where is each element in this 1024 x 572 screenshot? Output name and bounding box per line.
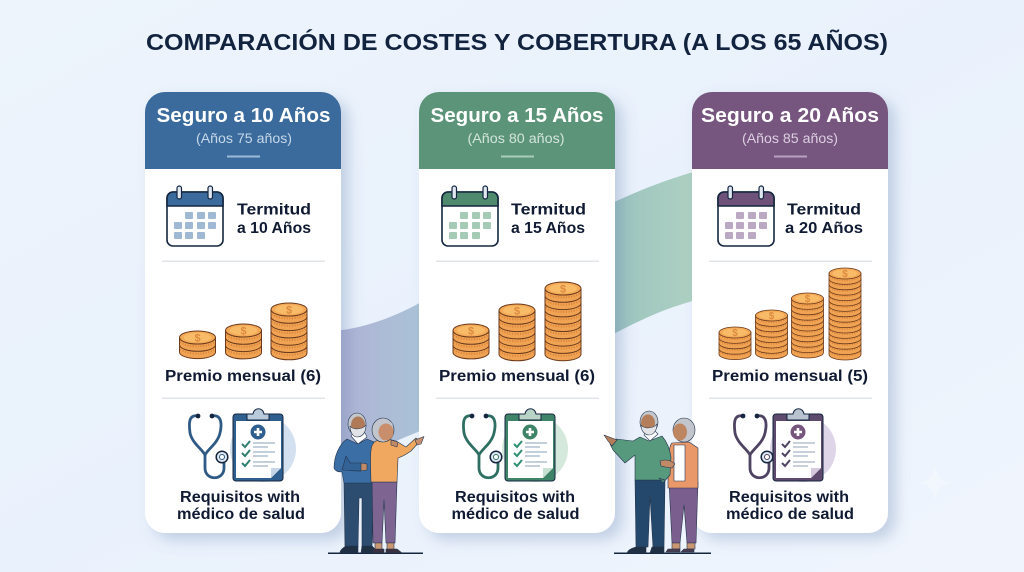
requirements label: médico de salud [726, 506, 854, 523]
card background [692, 92, 888, 533]
term label [237, 202, 311, 237]
hand on arm [660, 460, 675, 468]
card header [145, 92, 341, 169]
requirements label [726, 489, 854, 523]
term label: Termitud [511, 202, 586, 218]
figure: older couple pointing left [604, 411, 711, 554]
requirements label: Requisitos with [455, 489, 575, 506]
term label: Termitud [237, 202, 311, 218]
sparkle [919, 465, 951, 501]
term label: a 15 Años [511, 220, 585, 237]
icon: coin stacks: $ [769, 311, 775, 322]
card header [692, 92, 888, 169]
icon: coin stacks: $ [560, 284, 566, 296]
card header: Seguro a 20 Años [701, 104, 879, 127]
icon: coin stacks: $ [805, 294, 811, 305]
icon: coin stacks: $ [468, 326, 474, 338]
term label: a 20 Años [785, 220, 863, 237]
icon: calendar [167, 186, 223, 246]
icon: coin stacks [719, 268, 861, 360]
card header: (Años 80 años) [468, 131, 564, 146]
card background [145, 92, 341, 533]
icon: coin stacks: $ [514, 306, 520, 318]
card background [419, 92, 615, 533]
icon: calendar [718, 186, 774, 246]
panel: seguro a 15 años [419, 92, 615, 533]
man [604, 411, 671, 553]
term label: a 10 Años [237, 220, 311, 237]
card header: (Años 85 años) [742, 131, 838, 146]
panel: seguro a 10 años [145, 92, 341, 533]
premium label: Premio mensual (6) [439, 368, 595, 385]
panel: seguro a 20 años [692, 92, 888, 533]
icon: coin stacks: $ [842, 269, 848, 280]
figure: older couple pointing right [328, 413, 424, 554]
woman [666, 418, 698, 552]
requirements label: Requisitos with [180, 489, 300, 506]
premium label: Premio mensual (5) [712, 368, 868, 385]
woman [371, 418, 424, 553]
card header: Seguro a 15 Años [430, 104, 604, 127]
man [334, 413, 379, 553]
premium label: Premio mensual (6) [165, 368, 321, 385]
card header: (Años 75 años) [196, 131, 292, 146]
icon: coin stacks: $ [286, 304, 292, 316]
term label [511, 202, 586, 237]
term label: Termitud [787, 202, 861, 218]
card header: Seguro a 10 Años [156, 104, 330, 127]
card header [419, 92, 615, 169]
icon: coin stacks: $ [732, 328, 738, 339]
term label [785, 202, 863, 237]
icon: stethoscope and clipboard [463, 409, 568, 482]
icon: coin stacks: $ [194, 332, 201, 344]
requirements label: Requisitos with [729, 489, 849, 506]
background ribbon: lavender [335, 300, 425, 465]
background ribbon: teal [610, 170, 700, 336]
icon: stethoscope and clipboard [734, 409, 836, 482]
requirements label [452, 489, 580, 523]
requirements label: médico de salud [452, 506, 580, 523]
icon: calendar [442, 186, 498, 246]
icon: stethoscope and clipboard [189, 409, 296, 482]
title: COMPARACIÓN DE COSTES Y COBERTURA (A LOS 65 AÑOS) [146, 28, 888, 55]
requirements label [177, 489, 305, 523]
icon: coin stacks [453, 282, 581, 361]
requirements label: médico de salud [177, 506, 305, 523]
icon: coin stacks: $ [240, 326, 247, 338]
icon: coin stacks [180, 303, 307, 360]
